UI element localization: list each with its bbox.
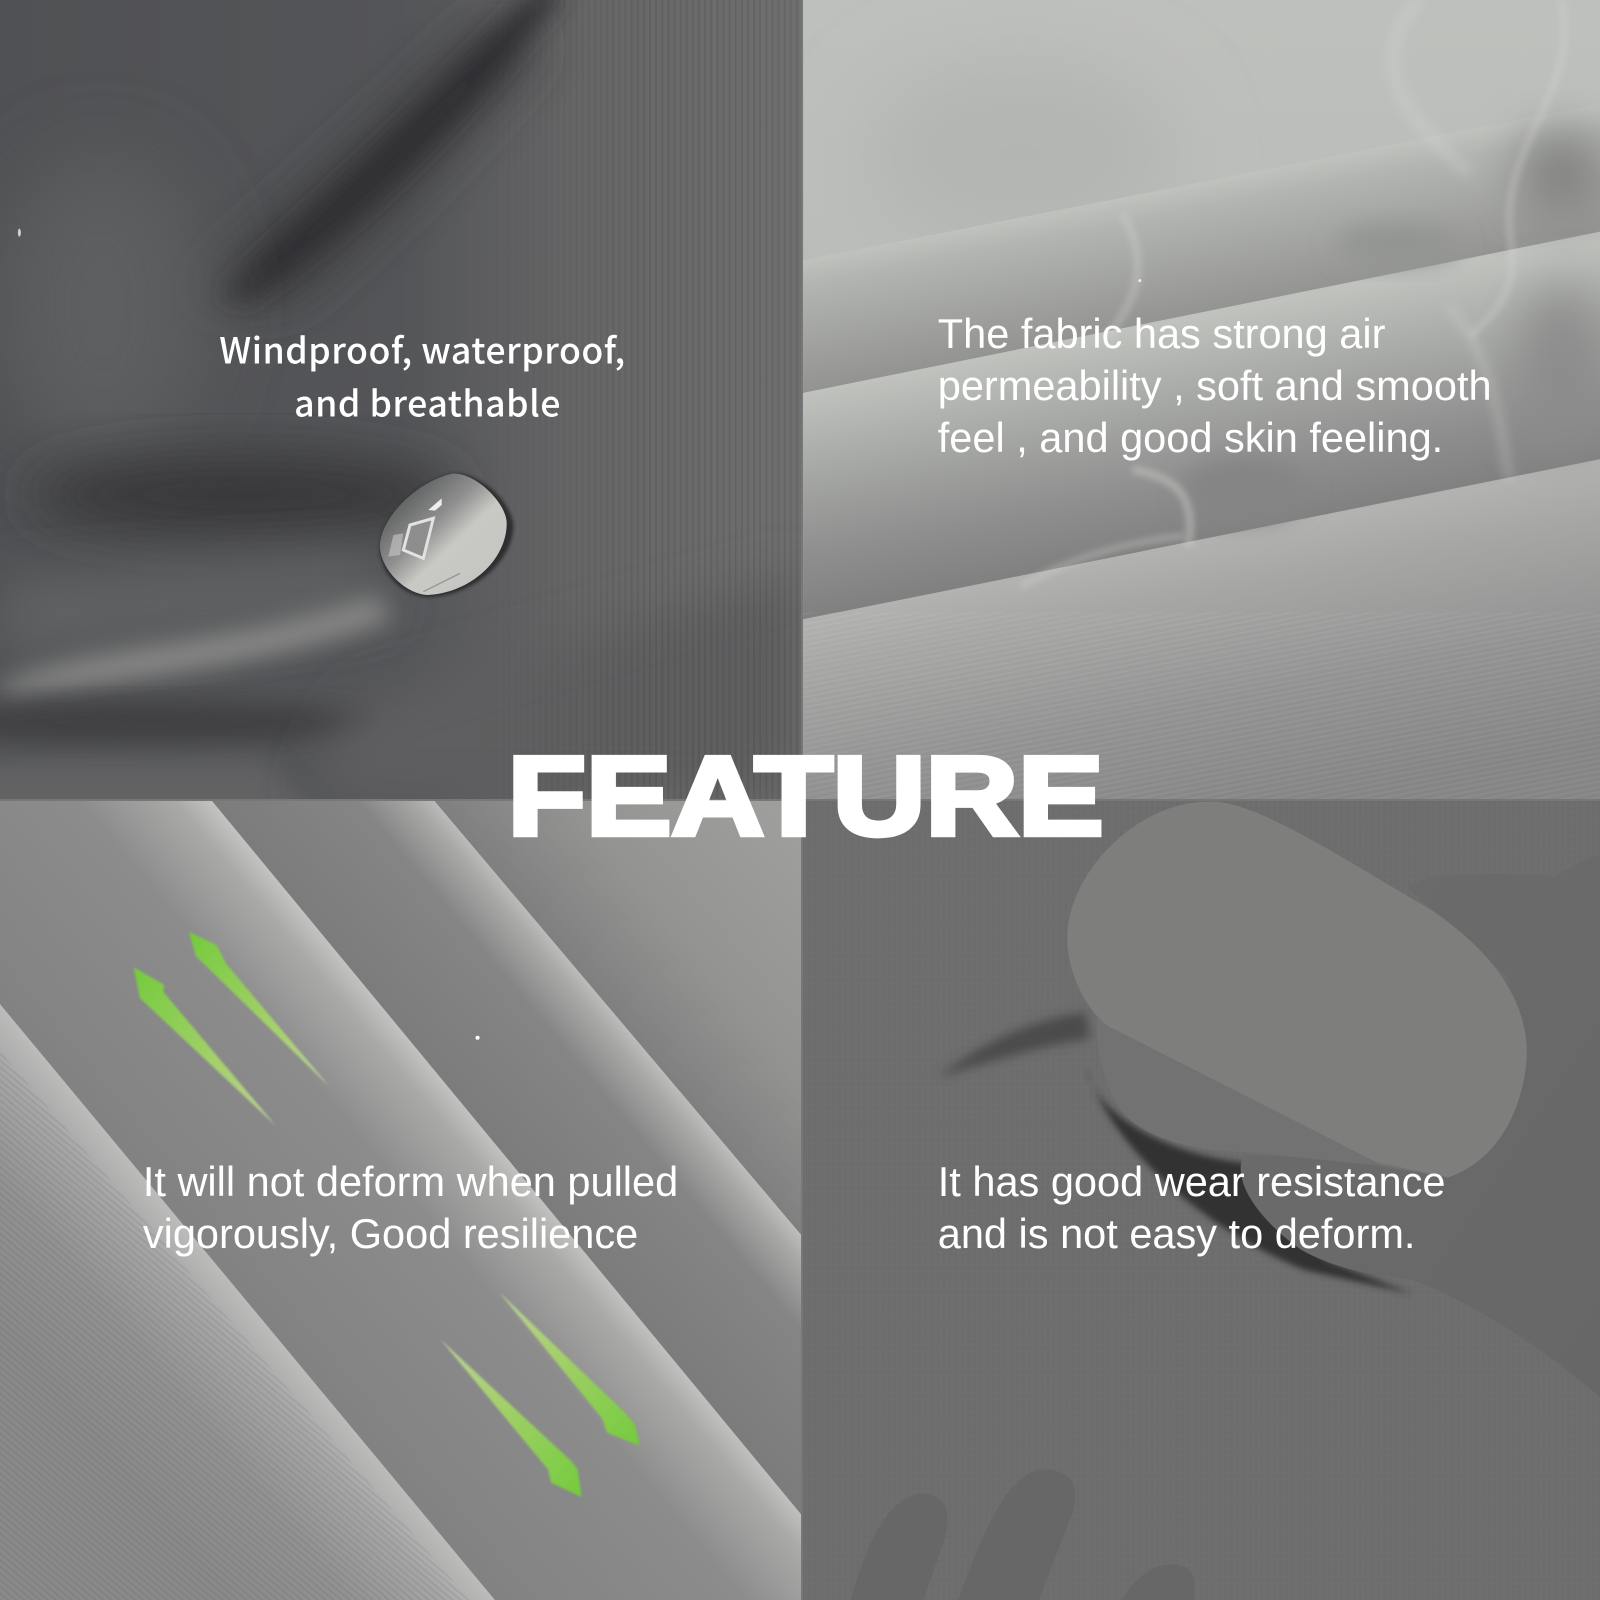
speck on fabric <box>1138 279 1141 282</box>
icon: hand <box>1240 1160 1600 1394</box>
panel: resilient fabric <box>0 800 801 1600</box>
arrow: green up-left lower <box>134 967 276 1126</box>
water droplet <box>380 473 513 597</box>
brush bristles shadow <box>1096 1093 1406 1294</box>
text: resilience: It will not deform when pulled <box>143 1158 678 1205</box>
panel: air permeable fabric <box>803 0 1600 799</box>
arrow: green down-right upper <box>499 1292 640 1446</box>
panel: windproof and waterproof fabric <box>0 0 801 827</box>
heading: windproof text <box>220 334 624 417</box>
panel: wear resistant fabric <box>803 801 1600 1600</box>
text: wear resistance: It has good wear resistance <box>938 1158 1445 1205</box>
speck on fabric <box>476 1036 480 1040</box>
text: air permeability: feel , and good skin feeling. <box>938 414 1443 461</box>
text: wear resistance: and is not easy to deform. <box>938 1210 1415 1257</box>
arrow: green up-left upper <box>189 932 330 1087</box>
heading: windproof text: Windproof, waterproof, <box>219 323 626 374</box>
arrow: green down-right lower <box>441 1340 582 1497</box>
text: resilience: vigorously, Good resilience <box>143 1210 638 1257</box>
title: FEATURE: FEATURE <box>508 733 1104 859</box>
heading: windproof text: and breathable <box>294 376 561 427</box>
smoke wisps <box>1024 114 1541 586</box>
text: air permeability: permeability , soft and smooth <box>938 362 1492 409</box>
icon: brush <box>1067 802 1527 1178</box>
speck on fabric <box>18 229 21 237</box>
icon: fingers <box>854 1484 1194 1596</box>
text: air permeability: The fabric has strong air <box>938 310 1386 357</box>
text: resilience <box>143 1158 678 1257</box>
text: wear resistance <box>938 1158 1445 1257</box>
text: air permeability <box>938 310 1492 461</box>
